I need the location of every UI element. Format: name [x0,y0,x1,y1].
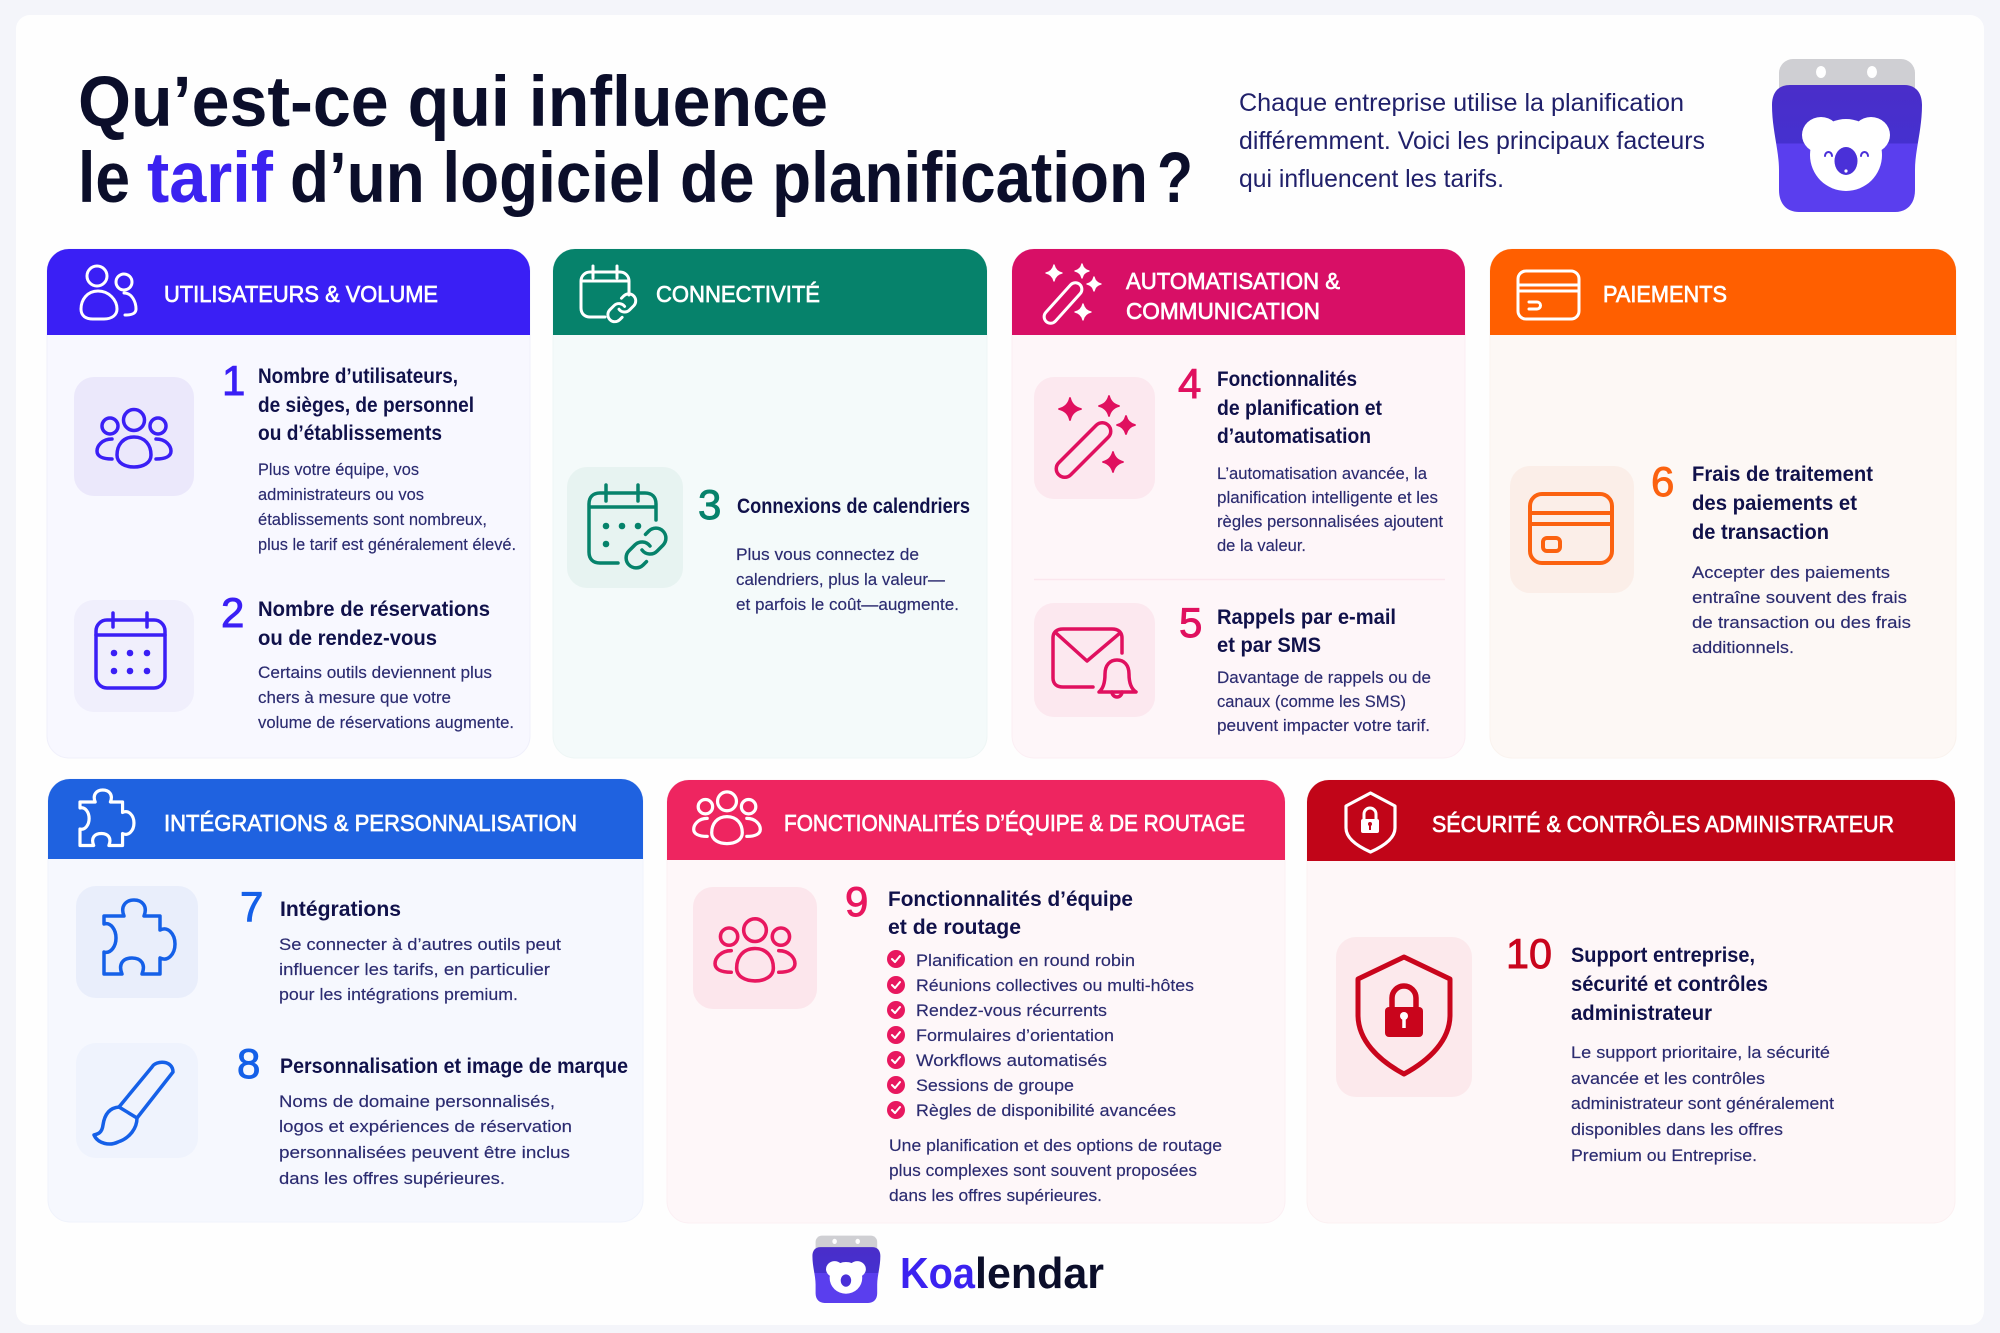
item 9 description: plus complexes sont souvent proposées [889,1161,1197,1180]
icon: users [81,266,136,319]
checklist: Workflows automatisés [916,1051,1107,1070]
heading: SÉCURITÉ & CONTRÔLES ADMINISTRATEUR [1432,810,1894,837]
item 8 description: personnalisées peuvent être inclus [279,1143,570,1162]
item 4 description: règles personnalisées ajoutent [1217,512,1443,531]
title: tarif [147,139,273,218]
heading: PAIEMENTS [1603,281,1727,307]
item 6 [1510,458,1911,657]
item 4 title: Fonctionnalités [1217,368,1357,391]
icon: puzzle piece [76,886,198,998]
item 8 description: logos et expériences de réservation [279,1117,572,1136]
icon: envelope with bell [1034,603,1155,717]
checklist: Réunions collectives ou multi-hôtes [916,976,1194,995]
item 5 description [1217,668,1431,735]
item 3 [567,467,970,614]
icon: shield with lock [1336,937,1472,1097]
item 1 description: établissements sont nombreux, [258,510,487,529]
item 7 description: influencer les tarifs, en particulier [279,960,550,979]
icon: credit card [1518,271,1579,319]
header bar [1012,249,1465,335]
footer logo [812,1236,1104,1303]
panel: automatisation et communication [1012,249,1465,758]
item 5 title: et par SMS [1217,634,1321,657]
panel: utilisateurs et volume [47,249,530,758]
item 9 title: et de routage [888,916,1021,939]
item 6 title: des paiements et [1692,492,1857,515]
number 1: 1 [222,357,245,404]
item 1 title: Nombre d’utilisateurs, [258,365,458,388]
item 4 description: de la valeur. [1217,536,1306,555]
item 8 description [279,1092,572,1188]
intro text: différemment. Voici les principaux facteurs [1239,127,1705,155]
title: d’un logiciel de planification [290,139,1148,218]
item 2 description: chers à mesure que votre [258,688,451,707]
item 10 description: disponibles dans les offres [1571,1120,1783,1139]
item 10 title: Support entreprise, [1571,944,1755,967]
panel: intégrations et personnalisation [48,779,643,1222]
heading: AUTOMATISATION & [1126,268,1340,294]
checklist: Rendez-vous récurrents [916,1001,1107,1020]
item 6 description [1692,563,1911,657]
item 8 description: dans les offres supérieures. [279,1169,505,1188]
number 6: 6 [1651,458,1674,505]
item 10 description: Premium ou Entreprise. [1571,1146,1757,1165]
panel: fonctionnalités d'équipe et de routage [667,780,1285,1223]
title [78,63,1193,218]
item 7 description: pour les intégrations premium. [279,985,518,1004]
number 7: 7 [240,883,263,930]
checklist: Règles de disponibilité avancées [916,1101,1176,1120]
header bar [553,249,987,335]
item 3 description: et parfois le coût—augmente. [736,595,959,614]
item 1 title [258,365,474,445]
icon: calendar [74,600,194,712]
item 10 description [1571,1043,1834,1165]
item 3 description: calendriers, plus la valeur— [736,570,945,589]
icon: koala calendar logo [1772,59,1922,212]
item 9 title [888,888,1133,939]
item 1 [74,357,516,554]
item 9 title: Fonctionnalités d’équipe [888,888,1133,911]
checklist [887,950,1194,1120]
item 3 description [736,545,959,614]
item 10 description: administrateur sont généralement [1571,1094,1834,1113]
item 2 title: Nombre de réservations [258,598,490,621]
item 10 description: avancée et les contrôles [1571,1069,1765,1088]
header bar [667,780,1285,860]
item 5 description: canaux (comme les SMS) [1217,692,1406,711]
checklist: Planification en round robin [916,951,1135,970]
panel: connectivité [553,249,987,758]
item 8 title: Personnalisation et image de marque [280,1055,628,1078]
item 7 description: Se connecter à d’autres outils peut [279,935,561,954]
icon: paint brush [76,1043,198,1158]
item 4 description [1217,464,1443,555]
title: le [78,139,130,218]
item 2 description [258,663,514,732]
item 6 description: Accepter des paiements [1692,563,1890,582]
item 4 title: de planification et [1217,397,1382,420]
item 7 [76,883,561,1004]
item 5 title [1217,606,1396,657]
item 4 title: d’automatisation [1217,425,1371,448]
item 9 description: Une planification et des options de routage [889,1136,1222,1155]
number 5: 5 [1179,599,1202,646]
icon: shield [1346,793,1395,852]
heading: COMMUNICATION [1126,298,1320,324]
item 2 [74,589,514,732]
title: Qu’est-ce qui influence [78,63,828,142]
item 2 description: volume de réservations augmente. [258,713,514,732]
item 1 description: administrateurs ou vos [258,485,424,504]
intro text [1239,89,1705,193]
item 7 description [279,935,561,1004]
item 1 title: ou d’établissements [258,422,442,445]
wordmark: Koa [900,1249,975,1298]
icon: team [694,792,760,844]
item 4 title [1217,368,1382,448]
item 7 title: Intégrations [280,898,401,921]
item 9 description [889,1136,1222,1205]
item 10 description: Le support prioritaire, la sécurité [1571,1043,1830,1062]
panel: paiements [1490,249,1956,758]
item 1 description [258,460,516,554]
heading: UTILISATEURS & VOLUME [164,281,438,307]
item 10 title [1571,944,1768,1025]
heading [1126,268,1340,324]
number 8: 8 [237,1040,260,1087]
item 2 title: ou de rendez-vous [258,627,437,650]
item 8 description: Noms de domaine personnalisés, [279,1092,555,1111]
icon: magic wand [1041,264,1101,326]
panel: sécurité et contrôles administrateur [1307,780,1955,1223]
item 3 description: Plus vous connectez de [736,545,919,564]
item 8 [76,1040,628,1188]
wordmark [900,1249,1104,1298]
item 9 description: dans les offres supérieures. [889,1186,1102,1205]
item 6 title: Frais de traitement [1692,463,1873,486]
header bar [48,779,643,859]
header bar [47,249,530,335]
icon: credit card [1510,466,1634,593]
checklist: Sessions de groupe [916,1076,1074,1095]
icon: magic wand [1034,377,1155,499]
item 5 title: Rappels par e-mail [1217,606,1396,629]
item 4 [1034,360,1443,555]
item 4 description: L’automatisation avancée, la [1217,464,1428,483]
item 6 description: additionnels. [1692,638,1794,657]
item 10 title: administrateur [1571,1002,1712,1025]
item 6 title [1692,463,1873,544]
icon: calendar link [581,266,636,322]
item 5 description: peuvent impacter votre tarif. [1217,716,1430,735]
number 10: 10 [1506,930,1552,977]
item 2 title [258,598,490,650]
item 1 title: de sièges, de personnel [258,394,474,417]
item 9 [693,878,1222,1205]
item 6 description: entraîne souvent des frais [1692,588,1907,607]
item 5 [1034,599,1431,735]
icon: koala calendar logo [812,1236,880,1303]
item 6 title: de transaction [1692,521,1829,544]
number 3: 3 [698,481,721,528]
wordmark: lendar [975,1249,1104,1298]
heading: INTÉGRATIONS & PERSONNALISATION [164,810,577,836]
item 4 description: planification intelligente et les [1217,488,1438,507]
title: ? [1157,139,1193,218]
number 2: 2 [221,589,244,636]
item 2 description: Certains outils deviennent plus [258,663,492,682]
item 3 title: Connexions de calendriers [737,495,970,518]
intro text: qui influencent les tarifs. [1239,165,1504,193]
header bar [1307,780,1955,861]
icon: team [74,377,194,496]
item 5 description: Davantage de rappels ou de [1217,668,1431,687]
icon: calendar link [567,467,683,588]
heading: FONCTIONNALITÉS D’ÉQUIPE & DE ROUTAGE [784,810,1245,836]
number 9: 9 [845,878,868,925]
intro text: Chaque entreprise utilise la planification [1239,89,1684,117]
icon: team [693,887,817,1009]
item 1 description: Plus votre équipe, vos [258,460,419,479]
heading: CONNECTIVITÉ [656,281,820,307]
number 4: 4 [1178,360,1201,407]
icon: puzzle piece [80,790,134,846]
item 1 description: plus le tarif est généralement élevé. [258,535,516,554]
header bar [1490,249,1956,335]
checklist: Formulaires d’orientation [916,1026,1114,1045]
item 10 title: sécurité et contrôles [1571,973,1768,996]
item 6 description: de transaction ou des frais [1692,613,1911,632]
item 10 [1336,930,1834,1165]
